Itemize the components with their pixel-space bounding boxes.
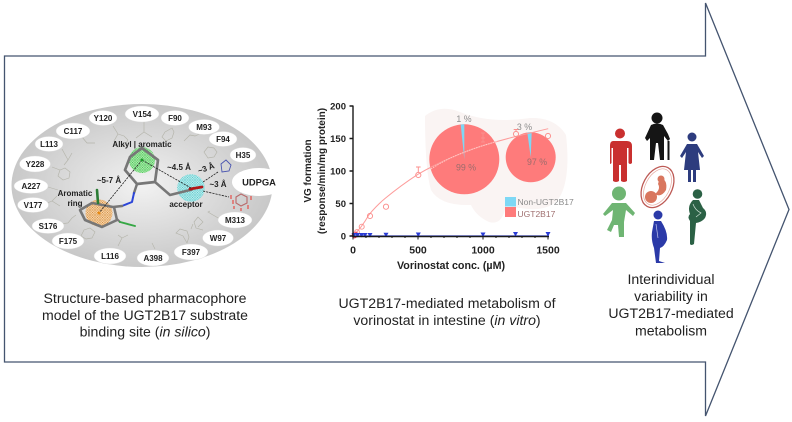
spheres	[129, 147, 155, 173]
pharmacophore and distance labels	[58, 140, 227, 209]
residue labels: L116	[101, 252, 119, 261]
pharmacophore and distance labels: ~5-7 Å	[97, 176, 121, 185]
pie chart 99 percent: 1 %	[456, 114, 472, 124]
caption: interindividual variability: Interindividual	[628, 271, 714, 287]
residue labels: V154	[133, 110, 152, 119]
icon: child	[603, 186, 635, 237]
caption: in silico: Structure-based pharmacophore	[44, 290, 247, 306]
x axis tick labels: 0	[350, 244, 356, 256]
y axis tick labels	[330, 102, 346, 242]
ligand skeleton	[80, 148, 202, 227]
data points UGT2B17	[352, 130, 551, 238]
x axis tick labels: 500	[409, 244, 427, 256]
caption: interindividual variability: metabolism	[635, 322, 707, 338]
UDPGA label: UDPGA	[242, 176, 276, 188]
panel: vorinostat metabolism chart	[303, 102, 574, 272]
x axis tick labels: 1500	[536, 244, 560, 256]
x axis title: Vorinostat conc. (µM)	[397, 260, 505, 272]
curve overlay on pie	[431, 141, 498, 169]
fitted curve	[353, 129, 548, 236]
caption: interindividual variability: UGT2B17-mediated	[608, 305, 734, 321]
y axis tick labels: 150	[330, 134, 346, 145]
y axis tick labels: 100	[330, 166, 346, 178]
distance lines	[99, 160, 229, 213]
UDPGA label	[232, 168, 286, 196]
pharmacophore and distance labels: acceptor	[169, 200, 203, 209]
caption: in vitro: vorinostat in intestine (in vitro)	[353, 312, 541, 328]
icon: fetus in womb	[634, 161, 681, 213]
y axis tick labels: 200	[330, 102, 346, 112]
icon: elderly woman	[680, 132, 704, 182]
pharmacophore and distance labels: ring	[67, 199, 83, 208]
y axis tick labels: 0	[341, 232, 346, 242]
residue labels: S176	[39, 222, 58, 231]
pharmacophore and distance labels: ~3 Å	[197, 161, 216, 176]
pie chart 99 percent: 99 %	[456, 162, 476, 172]
y axis tick labels: 50	[335, 199, 346, 210]
residue labels: Y120	[94, 114, 113, 123]
residue labels: L113	[40, 140, 58, 149]
panel: pharmacophore binding site model	[12, 104, 286, 267]
residue labels: F90	[168, 114, 182, 123]
pie legend: Non-UGT2B17	[518, 197, 574, 207]
pie chart 97 percent: 97 %	[527, 157, 547, 167]
binding site ellipse	[12, 104, 272, 267]
residue labels	[14, 106, 256, 266]
caption: in vitro: UGT2B17-mediated metabolism of	[339, 295, 556, 311]
icon: overweight person	[652, 210, 667, 263]
residue labels: A227	[21, 182, 41, 191]
caption: in silico: binding site (in silico)	[80, 324, 210, 340]
pharmacophore and distance labels: Aromatic	[58, 189, 93, 198]
residue labels: F397	[182, 248, 201, 257]
icon: elderly person with cane	[645, 112, 670, 160]
residue labels: V177	[24, 201, 43, 210]
pharmacophore and distance labels: Alkyl | aromatic	[112, 140, 172, 149]
pie chart 97 percent	[506, 122, 556, 182]
icon: pregnant woman	[688, 189, 706, 245]
imidazole of H35	[221, 160, 231, 172]
pie legend	[505, 197, 574, 219]
pie legend: UGT2B17	[518, 209, 556, 219]
pie chart 99 percent	[429, 114, 499, 194]
pharmacophore and distance labels: ~3 Å	[209, 180, 227, 189]
pie chart 97 percent: 3 %	[517, 122, 532, 132]
axes	[350, 106, 549, 236]
axis ticks	[353, 236, 548, 240]
residue labels: H35	[236, 151, 251, 160]
residue labels: F175	[59, 237, 78, 246]
residue labels: Y228	[26, 160, 45, 169]
residue labels: M313	[225, 216, 246, 225]
caption: interindividual variability: variability in	[634, 288, 708, 304]
residue labels: F94	[216, 135, 230, 144]
pharmacophore and distance labels: ~4.5 Å	[167, 163, 191, 172]
residue labels: M93	[196, 123, 212, 132]
intestine background silhouette	[425, 109, 567, 223]
residue labels: A398	[143, 254, 163, 263]
caption: in silico: model of the UGT2B17 substrate	[42, 307, 248, 323]
data points non-UGT2B17	[352, 232, 550, 238]
UDPGA sugar	[231, 194, 251, 211]
x axis tick labels	[350, 244, 560, 256]
residue side chains	[45, 122, 220, 249]
x axis tick labels: 1000	[471, 244, 495, 256]
icon: adult man	[610, 128, 632, 182]
residue labels: W97	[210, 234, 227, 243]
panel: population icons	[603, 112, 706, 263]
y axis title: VG formation	[303, 139, 314, 203]
residue labels: C117	[64, 127, 83, 136]
y axis title: (response/min/mg protein)	[317, 108, 328, 234]
